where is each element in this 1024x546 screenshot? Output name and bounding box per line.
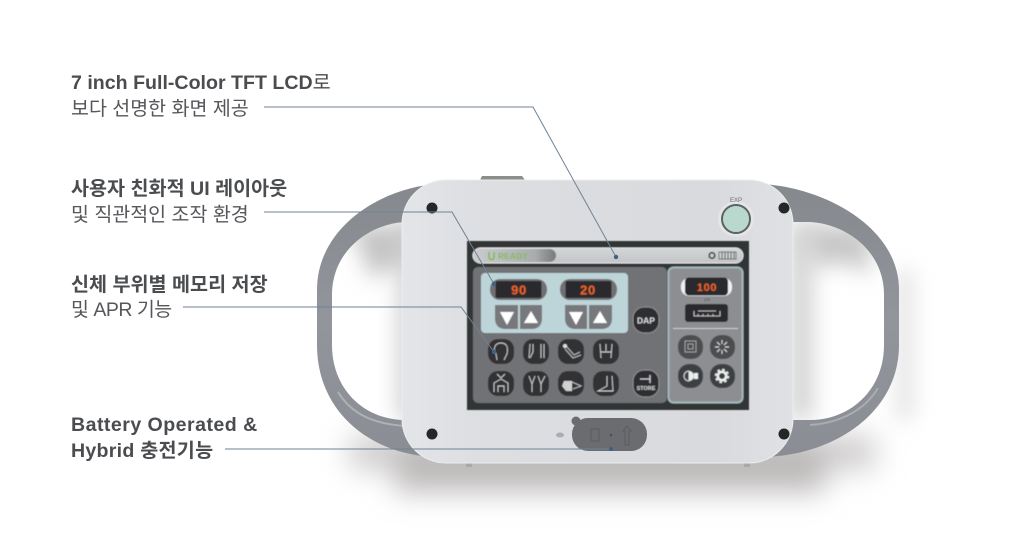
leader dots [492, 255, 618, 451]
heading: UI: 사용자 친화적 UI 레이아웃 [71, 178, 287, 200]
body part glyphs [494, 343, 613, 392]
kV mAs panel [481, 273, 628, 333]
EXP button: EXP [730, 198, 742, 204]
LED [556, 432, 564, 438]
mAs readout [560, 279, 617, 300]
DAP button [633, 307, 659, 333]
top knob [480, 176, 525, 180]
right handle [760, 184, 899, 457]
EXP button [718, 198, 754, 237]
heading: battery: Battery Operated & [71, 414, 258, 436]
small feet [466, 463, 750, 467]
device shadow [350, 270, 912, 492]
store button: STORE [637, 386, 656, 392]
battery port cover [572, 416, 647, 451]
heading: memory: 신체 부위별 메모리 저장 [71, 274, 268, 296]
heading: battery [71, 414, 258, 462]
DAP button: DAP [637, 316, 655, 326]
screen [467, 241, 749, 410]
left control panel [473, 267, 667, 403]
heading: memory [71, 274, 268, 321]
right control panel: cm [704, 297, 710, 302]
status bar: READY [498, 252, 528, 261]
left handle [317, 186, 424, 456]
right control panel [668, 268, 742, 402]
device [317, 176, 899, 467]
heading: LCD [71, 72, 331, 120]
right control panel: 100 [697, 282, 717, 294]
heading: UI [71, 178, 287, 226]
body part buttons [488, 339, 619, 396]
mAs readout: 20 [580, 282, 596, 298]
kV readout: 90 [511, 282, 527, 298]
heading: UI: 및 직관적인 조작 환경 [71, 204, 249, 226]
leader: battery [225, 448, 610, 450]
status bar [473, 248, 743, 263]
leader: memory [183, 307, 494, 352]
heading: LCD: 7 inch Full-Color TFT LCD로 [71, 72, 331, 94]
heading: battery: Hybrid 충전기능 [71, 440, 213, 462]
tool buttons [678, 335, 735, 388]
screws [426, 202, 790, 440]
kV readout [490, 279, 547, 300]
leader: UI [264, 212, 494, 284]
main body [402, 180, 793, 463]
arrow buttons [495, 305, 612, 329]
store button [633, 370, 659, 397]
leader: LCD [264, 107, 616, 257]
heading: memory: 및 APR 기능 [71, 299, 172, 321]
heading: LCD: 보다 선명한 화면 제공 [71, 98, 249, 120]
